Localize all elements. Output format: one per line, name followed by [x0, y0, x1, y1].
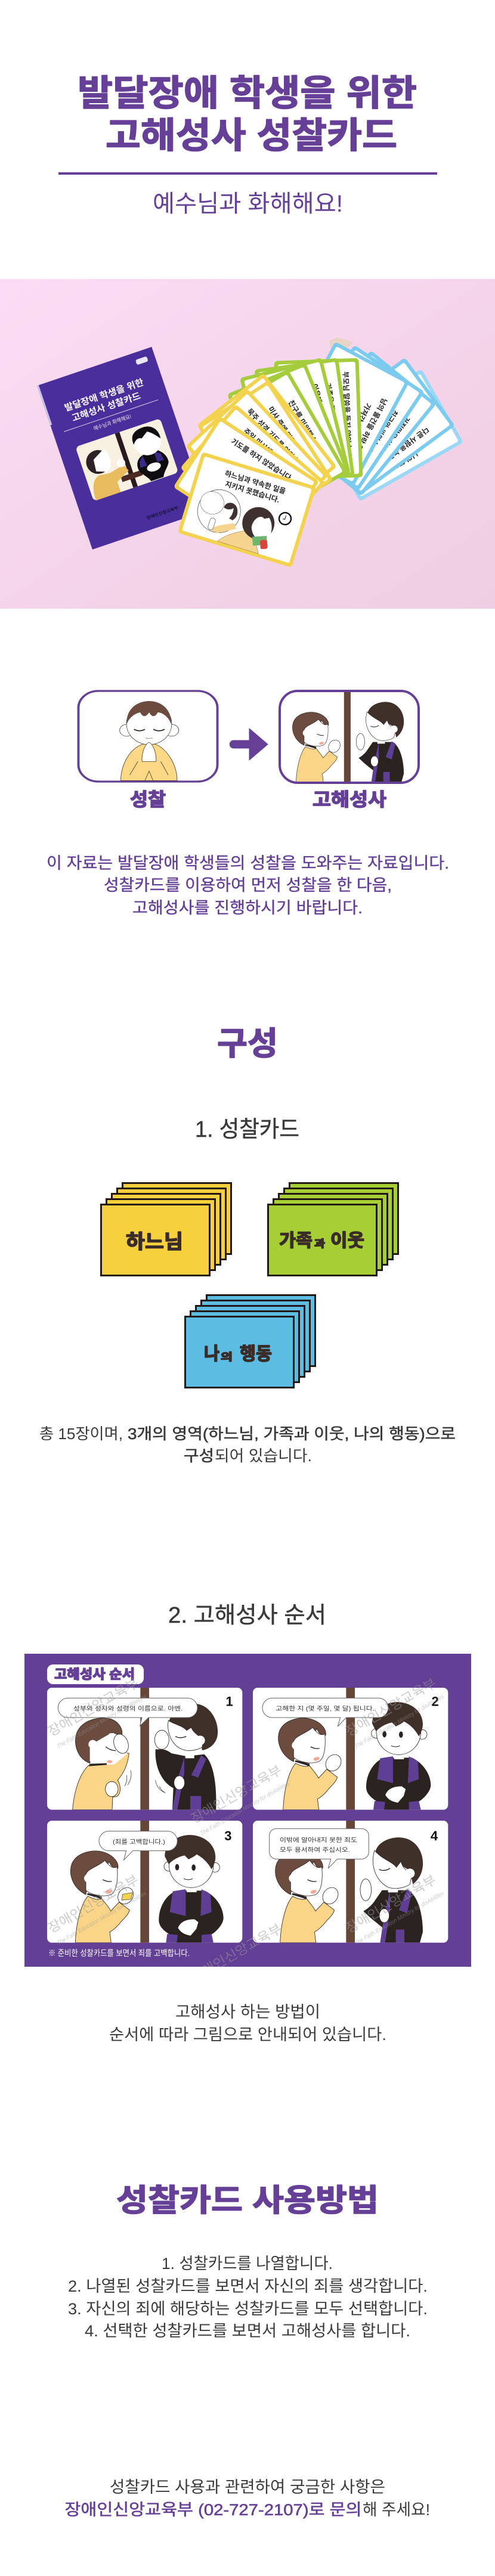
comic step 2: 2	[432, 1694, 439, 1709]
watermarks: The Faith Education Ministry for disAbilities	[199, 1781, 291, 1837]
green cards	[274, 358, 363, 480]
watermarks: The Faith Education Ministry for disAbilities	[56, 1890, 148, 1947]
watermarks: 장애인신앙교육부	[188, 1921, 284, 1985]
label: examination: 성찰	[130, 789, 166, 810]
comic step 2: 고해한 지 (몇 주일, 몇 달) 됩니다.	[276, 1704, 375, 1712]
subheading: cards: 1. 성찰카드	[195, 1117, 299, 1142]
yellow cards	[197, 373, 337, 519]
panel: confession icon	[280, 689, 419, 785]
booklet cover: 장애인신앙교육부	[146, 505, 180, 521]
front card: 지키지 못했습니다.	[224, 479, 281, 504]
comic step 4: 이밖에 알아내지 못한 죄도	[280, 1837, 357, 1844]
card stack: family and neighbours: 가족	[279, 1231, 313, 1251]
subtitle: 예수님과 화해해요!	[153, 191, 343, 217]
card fan: 거짓말을 하였습니다.	[365, 414, 412, 469]
card stack: family and neighbours: 과	[314, 1238, 325, 1250]
front card	[178, 452, 316, 568]
card fan: 미사 중에 떠들었습니다.	[267, 405, 313, 470]
card fan: 묵주 성경 기도를 않았습니다.	[245, 407, 311, 476]
watermarks: 장애인신앙교육부	[188, 1762, 284, 1826]
booklet cover: 예수님과 화해해요!	[93, 413, 132, 432]
label pill: 고해성사 순서	[54, 1667, 135, 1682]
comic step 4: 4	[431, 1828, 438, 1843]
panel: product photo	[0, 279, 495, 609]
confession order description: 고해성사 하는 방법이	[175, 2003, 320, 2021]
footnote: ※ 준비한 성찰카드를 보면서 죄를 고백합니다.	[48, 1948, 190, 1958]
blue cards: 나의 행동	[391, 450, 419, 471]
booklet cover: 고해성사 성찰카드	[70, 391, 142, 424]
usage steps	[68, 2255, 428, 2340]
watermarks: The Faith Education Ministry for disAbilities	[56, 1694, 148, 1750]
intro paragraph: 성찰카드를 이용하여 먼저 성찰을 한 다음,	[104, 876, 392, 894]
title: 고해성사 성찰카드	[106, 116, 397, 156]
contact note: 성찰카드 사용과 관련하여 궁금한 사항은	[110, 2478, 385, 2496]
comic step 3: 3	[224, 1828, 231, 1843]
title	[78, 73, 417, 156]
card fan: 기도를 하지 않았습니다.	[230, 436, 295, 483]
panel: examination of conscience icon	[79, 691, 218, 782]
contact note	[64, 2478, 430, 2519]
intro paragraph: 고해성사를 진행하시기 바랍니다.	[132, 899, 363, 917]
comic step 3	[47, 1821, 242, 1943]
confession order description: 순서에 따라 그림으로 안내되어 있습니다.	[109, 2026, 386, 2044]
card fan: 이웃에게 화를 냈습니다.	[310, 383, 336, 454]
blue cards	[318, 369, 463, 501]
heading: composition: 구성	[217, 1026, 278, 1062]
booklet cover	[37, 347, 207, 550]
card stack: family and neighbours	[268, 1183, 398, 1276]
card stack: my actions	[185, 1295, 315, 1388]
cards description: 3개의 영역(하느님, 가족과 이웃, 나의 행동)으로	[128, 1425, 456, 1443]
subheading: confession order: 2. 고해성사 순서	[168, 1603, 326, 1628]
watermarks: The Faith Education Ministry for disAbilities	[354, 1890, 446, 1947]
watermarks: The Faith Education Ministry for disAbilities	[354, 1694, 446, 1750]
card stack: God: 하느님	[126, 1230, 183, 1253]
label: confession: 고해성사	[313, 789, 386, 810]
booklet cover: 발달장애 학생을 위한	[63, 377, 145, 414]
card fan: 친구와 싸웠습니다.	[361, 408, 400, 460]
usage steps: 3. 자신의 죄에 해당하는 성찰카드를 모두 선택합니다.	[68, 2300, 428, 2318]
usage steps: 1. 성찰카드를 나열합니다.	[162, 2255, 333, 2273]
card fan: 다른 사람을 놀렸습니다.	[367, 425, 431, 475]
card fan	[173, 337, 463, 568]
card fan: 남의 물건을 허락 없이	[351, 396, 389, 458]
intro paragraph	[47, 854, 449, 917]
comic step 2	[253, 1688, 448, 1810]
front card: 하느님과 약속한 일을	[224, 469, 287, 495]
card stack: my actions: 행동	[240, 1344, 272, 1364]
cards description	[39, 1425, 456, 1465]
watermarks: 장애인신앙교육부	[343, 1675, 439, 1739]
title: 발달장애 학생을 위한	[78, 73, 417, 113]
label pill	[47, 1664, 144, 1684]
card fan: 친구를 미워했습니다.	[286, 398, 326, 457]
green cards: 부모님 말씀을 듣지 않았습니다.	[341, 371, 354, 465]
contact note: 해 주세요!	[363, 2501, 430, 2519]
cards description: 되어 있습니다.	[215, 1447, 312, 1465]
contact note: 장애인신앙교육부 (02-727-2107)로 문의	[64, 2501, 361, 2519]
cards description: 구성	[184, 1447, 214, 1465]
card stack: my actions: 나	[204, 1344, 219, 1364]
card fan: 가져갔습니다.	[346, 402, 373, 442]
comic step 4	[253, 1821, 448, 1943]
card fan: 주일 미사에 빠졌습니다.	[242, 426, 302, 481]
watermarks: 장애인신앙교육부	[45, 1675, 141, 1739]
card stack: God	[101, 1183, 231, 1276]
intro paragraph: 이 자료는 발달장애 학생들의 성찰을 도와주는 자료입니다.	[47, 854, 449, 872]
comic step 3: (죄를 고백합니다.)	[113, 1839, 165, 1846]
card fan: 가족을 돕지 않았습니다.	[324, 383, 342, 455]
card stack: family and neighbours: 이웃	[330, 1231, 364, 1251]
usage steps: 2. 나열된 성찰카드를 보면서 자신의 죄를 생각합니다.	[68, 2277, 428, 2295]
panel: confession order	[24, 1654, 471, 1985]
heading: how to use: 성찰카드 사용방법	[116, 2184, 379, 2218]
usage steps: 4. 선택한 성찰카드를 보면서 고해성사를 합니다.	[85, 2322, 410, 2340]
watermarks: 장애인신앙교육부	[45, 1872, 141, 1936]
comic step 1: 1	[226, 1694, 233, 1709]
comic step 1: 성부와 성자와 성령의 이름으로. 아멘.	[73, 1705, 182, 1712]
confession order description	[109, 2003, 386, 2044]
comic step 1	[47, 1688, 242, 1810]
comic step 4: 모두 용서하여 주십시오.	[280, 1846, 350, 1854]
watermarks	[45, 1675, 446, 1985]
card stack: my actions: 의	[221, 1351, 233, 1363]
arrow	[230, 729, 268, 760]
watermarks: 장애인신앙교육부	[343, 1872, 439, 1936]
cards description: 총 15장이며,	[39, 1425, 123, 1443]
